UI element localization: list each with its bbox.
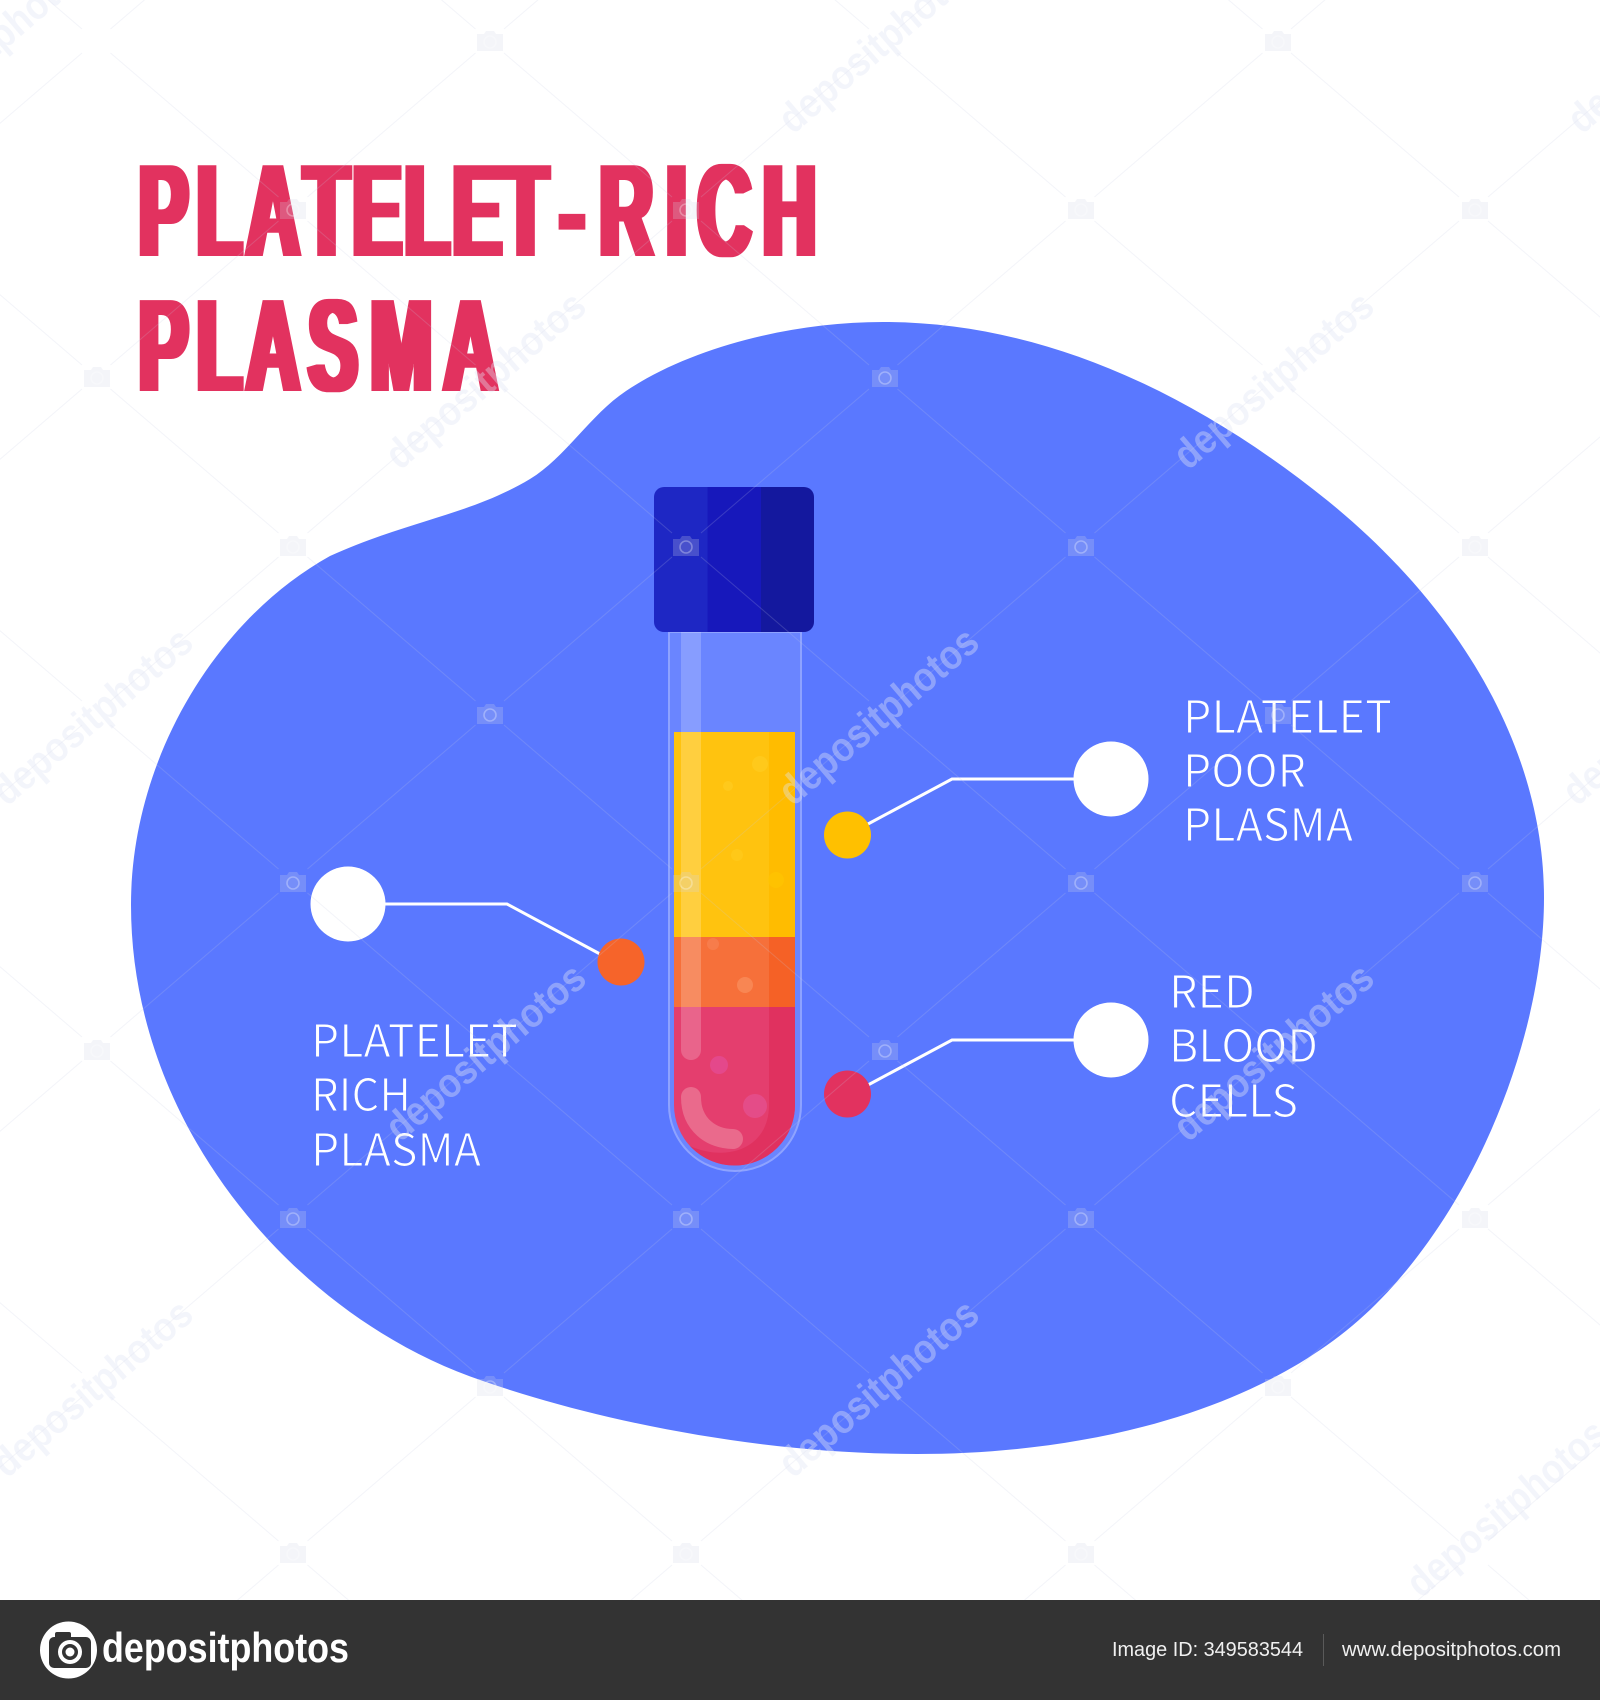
platelet layer: orange [674,937,795,1007]
divider [1323,1634,1324,1666]
blue blob panel [131,322,1544,1454]
image id: Image ID: 349583544 [1112,1639,1303,1661]
label [1169,956,1318,1130]
title: PLASMA [139,271,497,419]
red dot [824,1070,871,1118]
label: PLATELET [311,1005,518,1070]
label: POOR [1183,735,1306,800]
diagonal watermarks: depositphotos [769,618,987,814]
glass tube body [669,632,801,1171]
icon: depositphotos camera logo [40,1622,97,1678]
diagonal watermarks: depositphotos [1164,954,1382,1150]
label: PLASMA [1183,789,1354,854]
yellow dot [824,812,871,858]
liquid right shading [690,732,795,1166]
vertical highlight [681,632,701,1060]
logo wordmark: depositphotos [102,1624,349,1671]
white marker [1074,1002,1148,1078]
label [1183,681,1392,854]
plasma layer: yellow [674,732,795,937]
diagonal watermarks: depositphotos [376,954,594,1150]
tube cap [654,487,814,632]
label: BLOOD [1169,1010,1318,1075]
test tube [654,487,814,1171]
curved highlight [691,1097,733,1139]
watermark camera icons [84,31,1488,1563]
label: RICH [311,1059,411,1124]
label: CELLS [1169,1065,1298,1130]
red blood cell layer [674,1007,795,1165]
bubbles [707,756,784,1118]
website: www.depositphotos.com [1341,1639,1561,1661]
footer bar [0,1600,1600,1700]
callout: red blood cells [824,956,1318,1130]
connector line [868,1040,1074,1085]
callout: platelet poor plasma [824,681,1392,858]
callout: platelet rich plasma [310,866,644,1179]
orange dot [598,938,644,986]
label: PLATELET [1183,681,1392,746]
connector line [385,904,600,954]
title: PLATELET-RICH [139,136,816,284]
diagonal watermarks: depositphotos [769,1290,987,1486]
title [139,136,816,419]
label: PLASMA [311,1114,482,1179]
diagonal watermarks: depositphotos [1164,282,1382,478]
connector line [868,779,1074,824]
diagonal watermarks: depositphotos [376,282,594,478]
white marker [1074,742,1148,816]
label: RED [1169,956,1255,1021]
label [311,1005,518,1179]
white marker [310,866,386,942]
